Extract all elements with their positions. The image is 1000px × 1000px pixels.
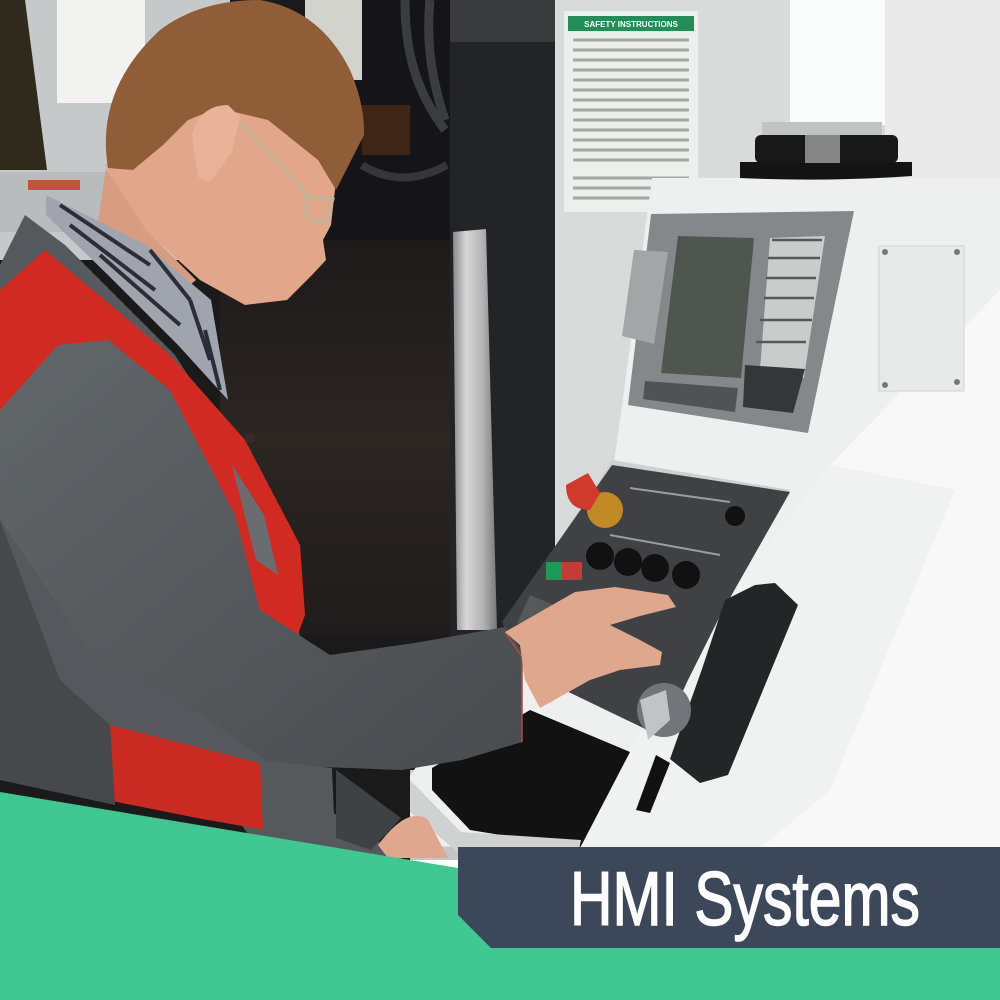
ear bbox=[192, 105, 240, 182]
red vest bbox=[0, 250, 305, 649]
hand bbox=[505, 587, 676, 708]
control knobs bbox=[546, 506, 745, 589]
worker bbox=[0, 0, 676, 907]
hair bbox=[106, 0, 364, 190]
sleeve bbox=[0, 340, 522, 770]
head and neck bbox=[105, 60, 335, 305]
handheld pendant bbox=[636, 583, 798, 813]
control panel bbox=[502, 465, 790, 737]
round machine fixture on top bbox=[740, 122, 912, 180]
lower jacket bbox=[0, 520, 115, 805]
striped collar bbox=[46, 195, 228, 400]
machine body bbox=[410, 178, 1000, 854]
emergency stop button bbox=[566, 473, 623, 528]
title banner bbox=[458, 847, 1000, 948]
green footer shape bbox=[0, 792, 1000, 1000]
sleeve cuff line bbox=[505, 632, 522, 742]
HMI screen panel bbox=[622, 211, 854, 433]
safety instructions sign: SAFETY INSTRUCTIONS bbox=[584, 20, 678, 29]
vest button bbox=[245, 433, 255, 443]
safety instructions sign bbox=[564, 11, 698, 212]
silver pipe bbox=[453, 229, 497, 630]
glasses bbox=[240, 123, 333, 224]
body grey jacket bbox=[0, 215, 410, 907]
grey side panel bbox=[232, 465, 278, 575]
